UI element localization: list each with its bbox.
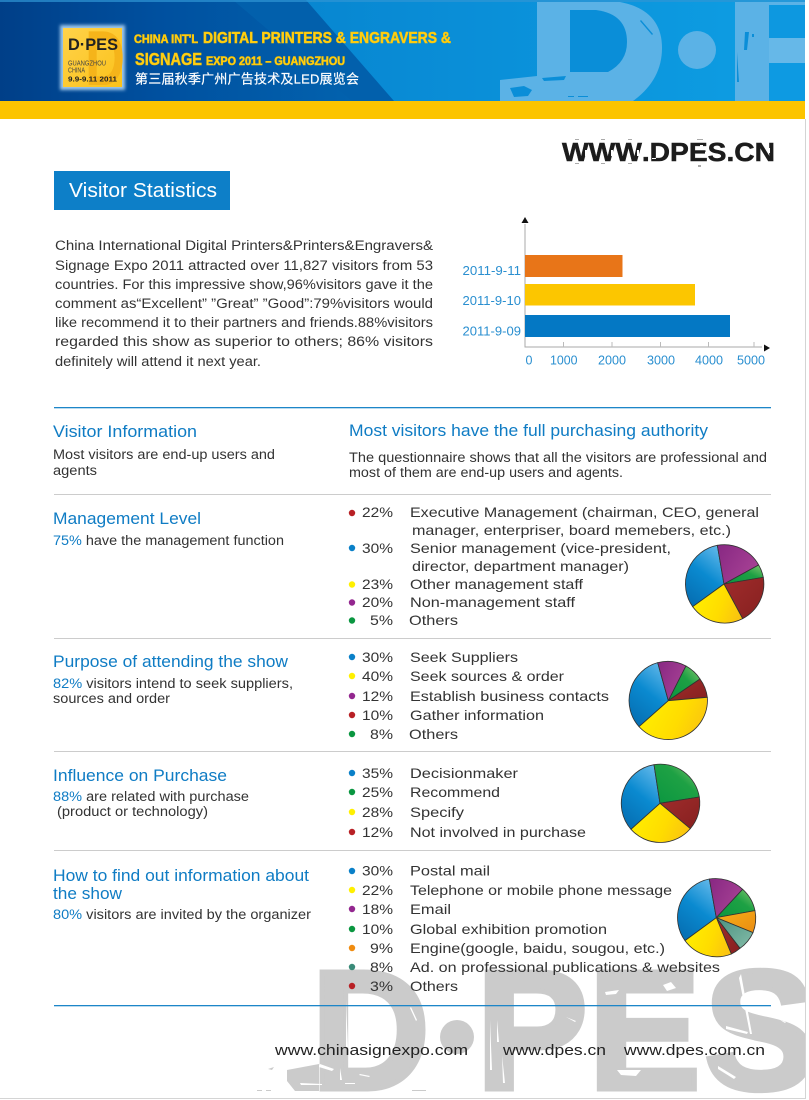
panel: how to find out information: How to find out information about (53, 867, 309, 885)
divider lines (54, 407, 771, 1006)
panel: influence on purchase: 12% (362, 824, 393, 840)
panel: visitor information: Most visitors have the full purchasing authority (349, 422, 709, 440)
panel: influence on purchase: Recommend (410, 784, 500, 800)
bar chart: visitors per day: 5000 (737, 354, 765, 368)
panel: management level: 20% (362, 594, 393, 610)
arrowheads (522, 217, 770, 352)
bar chart: visitors per day: 0 (526, 354, 532, 368)
expo title: 第三届秋季广州广告技术及LED展览会 (135, 72, 359, 86)
panel: influence on purchase: 25% (362, 784, 393, 800)
intro paragraph: definitely will attend it next year. (55, 354, 261, 369)
panel: purpose of attending: Seek sources & order (410, 668, 564, 684)
panel: purpose of attending: 30% (362, 649, 393, 665)
header banner (0, 0, 805, 101)
panel: purpose of attending: sources and order (53, 691, 171, 706)
bar chart: visitors per day: 2011-9-11 (462, 264, 521, 278)
panel: how to find out information: 18% (362, 901, 393, 917)
logo: D (85, 14, 125, 102)
logo: 9.9-9.11 2011 (68, 74, 117, 84)
panel: how to find out information: 8% (370, 959, 393, 975)
panel: management level: 22% (362, 504, 393, 520)
pie chart: purpose (629, 661, 707, 740)
panel: purpose of attending: 8% (370, 726, 393, 742)
panel: purpose of attending: 40% (362, 668, 393, 684)
panel: visitor information: Visitor Information (53, 423, 197, 441)
expo title: EXPO 2011 – GUANGZHOU (206, 56, 345, 68)
heading: Visitor Statistics: Visitor Statistics (69, 180, 217, 202)
panel: how to find out information: Engine(google, baidu, sougou, etc.) (410, 940, 665, 956)
panel: management level: Non-management staff (410, 594, 575, 610)
bar chart: visitors per day: 1000 (550, 354, 578, 368)
panel: management level: 5% (370, 612, 393, 628)
panel: management level: Management Level (53, 510, 201, 528)
panel: influence on purchase (53, 764, 700, 843)
background watermark: D·PES (257, 968, 805, 1094)
panel: purpose of attending: 82% visitors intend to seek suppliers, (53, 676, 293, 691)
panel: visitor information: agents (53, 463, 97, 478)
intro paragraph: China International Digital Printers&Printers&Engravers& (55, 238, 433, 253)
footer website links (274, 1042, 765, 1059)
panel: influence on purchase: (product or technology) (57, 804, 208, 819)
panel: influence on purchase: Decisionmaker (410, 765, 518, 781)
bar chart: visitors per day: 3000 (647, 354, 675, 368)
panel: management level: Senior management (vice-president, (410, 540, 671, 556)
panel: influence on purchase: Specify (410, 804, 464, 820)
panel: how to find out information: Email (410, 901, 451, 917)
panel: how to find out information: 3% (370, 978, 393, 994)
panel: how to find out information: the show (53, 885, 122, 903)
panel: management level (53, 504, 764, 628)
pie chart: influence (621, 764, 700, 843)
panel: how to find out information: Postal mail (410, 862, 490, 878)
pie chart: information source (678, 878, 756, 957)
website stamp: WWW.DPES.CN (562, 137, 775, 167)
panel: visitor information: most of them are end-up users and agents. (349, 465, 623, 480)
panel: purpose of attending: Others (409, 726, 458, 742)
panel: purpose of attending: Purpose of attending the show (53, 653, 288, 671)
panel: how to find out information: Global exhibition promotion (410, 921, 607, 937)
footer website links: www.chinasignexpo.com (274, 1042, 468, 1059)
panel: how to find out information: 10% (362, 921, 393, 937)
bar chart: visitors per day: 2011-9-10 (462, 294, 521, 308)
panel: how to find out information: 9% (370, 940, 393, 956)
bar chart: visitors per day: 2000 (598, 354, 626, 368)
footer website links: www.dpes.cn (502, 1042, 606, 1059)
panel: management level: manager, enterpriser, board memebers, etc.) (412, 522, 731, 538)
panel: purpose of attending: Gather information (410, 707, 544, 723)
expo title: SIGNAGE (135, 49, 202, 69)
panel: how to find out information: Ad. on professional publications & websites (410, 959, 720, 975)
expo title: CHINA INT'L (134, 34, 198, 46)
panel: visitor information: Most visitors are end-up users and (53, 447, 275, 462)
panel: purpose of attending (53, 649, 707, 742)
expo title: DIGITAL PRINTERS & ENGRAVERS & (203, 30, 451, 47)
panel: management level: Others (409, 612, 458, 628)
intro paragraph: like recommend it to their partners and friends.88%visitors (55, 315, 433, 330)
bar chart: visitors per day (462, 217, 770, 368)
logo: CHINA (68, 68, 85, 74)
yellow band (0, 101, 805, 119)
panel: influence on purchase: Not involved in purchase (410, 824, 586, 840)
pie chart: management level (685, 545, 764, 623)
bar chart: visitors per day: 2011-9-09 (462, 324, 521, 338)
panel: management level: 30% (362, 540, 393, 556)
panel: purpose of attending: 10% (362, 707, 393, 723)
panel: how to find out information: 22% (362, 882, 393, 898)
panel: visitor information (53, 422, 767, 480)
logo: GUANGZHOU (68, 60, 106, 68)
panel: influence on purchase: 88% are related with purchase (53, 789, 249, 804)
footer website links: www.dpes.com.cn (623, 1042, 765, 1059)
panel: purpose of attending: Seek Suppliers (410, 649, 518, 665)
panel: how to find out information: 30% (362, 862, 393, 878)
panel: management level: 75% have the management function (53, 533, 284, 548)
panel: how to find out information (53, 862, 756, 994)
panel: influence on purchase: Influence on Purchase (53, 767, 227, 785)
logo (60, 14, 125, 102)
intro paragraph: regarded this show as superior to others; 86% visitors (55, 334, 433, 349)
panel: purpose of attending: Establish business contacts (410, 688, 609, 704)
panel: visitor information: The questionnaire shows that all the visitors are professional and (349, 450, 767, 465)
intro paragraph: Signage Expo 2011 attracted over 11,827 visitors from 53 (55, 258, 433, 273)
panel: management level: 23% (362, 576, 393, 592)
panel: how to find out information: 80% visitors are invited by the organizer (53, 907, 312, 922)
panel: management level: Other management staff (410, 576, 583, 592)
expo title (134, 30, 451, 86)
logo: D·PES (68, 36, 118, 54)
panel: management level: director, department manager) (412, 558, 629, 574)
bar chart: visitors per day: 4000 (695, 354, 723, 368)
panel: purpose of attending: 12% (362, 688, 393, 704)
intro paragraph: comment as“Excellent” ”Great” ”Good”:79%visitors would (55, 296, 433, 311)
header watermark (500, 2, 805, 101)
panel: influence on purchase: 35% (362, 765, 393, 781)
heading: Visitor Statistics (54, 171, 230, 210)
panel: how to find out information: Others (410, 978, 458, 994)
panel: management level: Executive Management (chairman, CEO, general (410, 504, 759, 520)
intro paragraph: countries. For this impressive show,96%visitors gave it the (55, 277, 433, 292)
intro paragraph (55, 238, 433, 369)
panel: influence on purchase: 28% (362, 804, 393, 820)
panel: how to find out information: Telephone or mobile phone message (410, 882, 672, 898)
